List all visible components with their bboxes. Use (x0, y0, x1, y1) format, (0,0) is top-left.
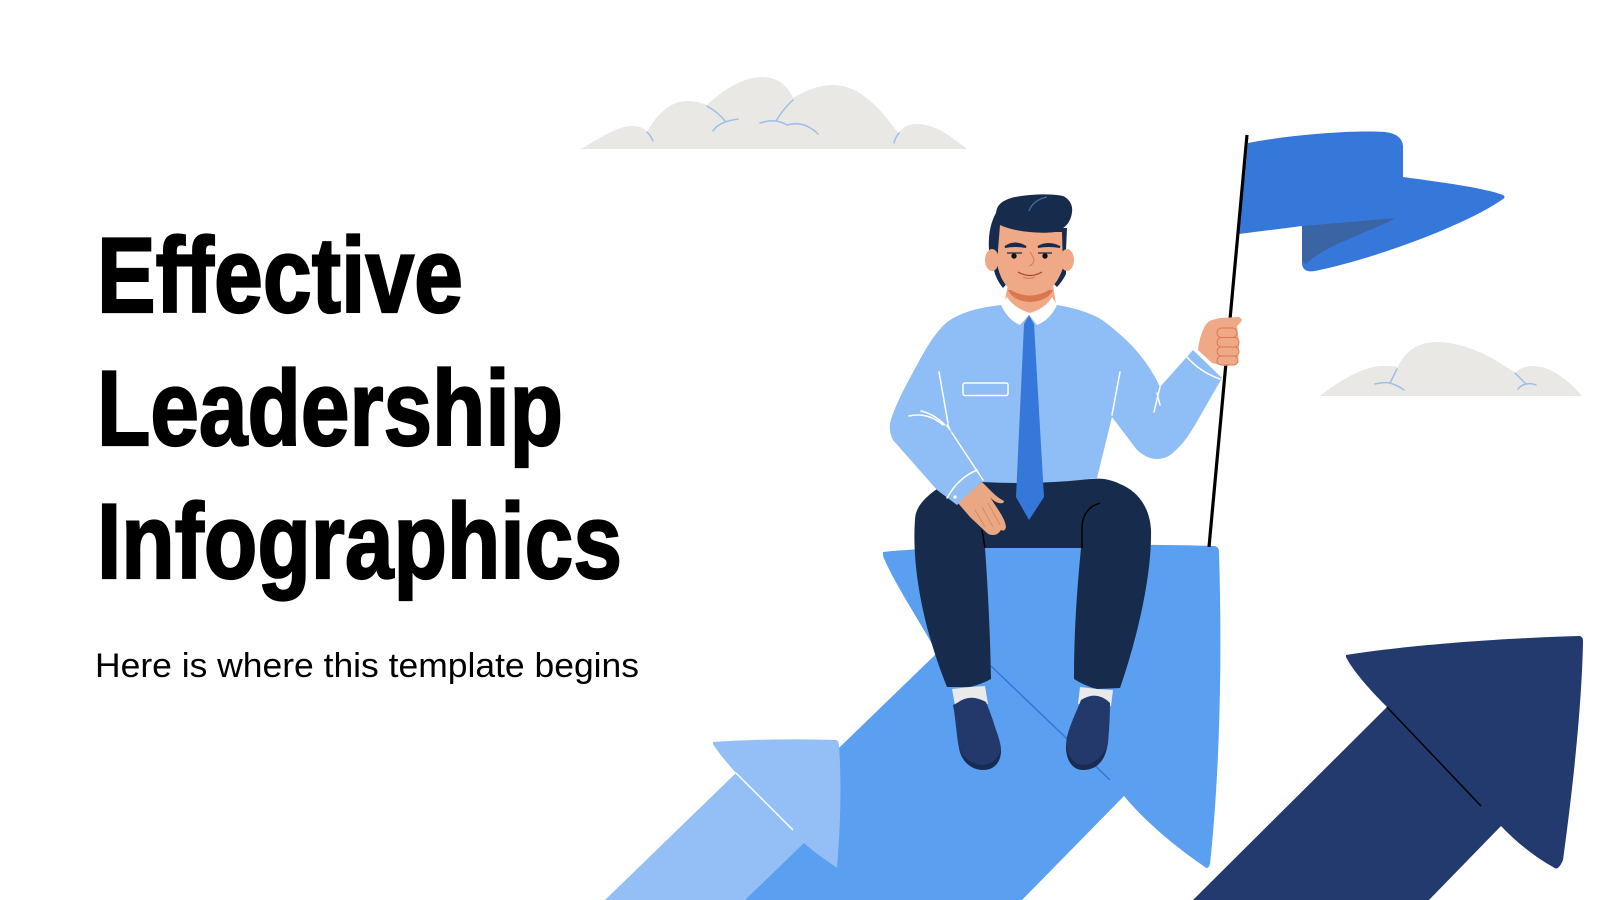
cloud: right (1320, 342, 1582, 396)
back hair (989, 204, 1067, 288)
tie (1016, 315, 1044, 520)
hand holding pole (1198, 317, 1242, 366)
title: Infographics (97, 481, 622, 601)
hand on knee (958, 482, 1006, 535)
flag front (1239, 132, 1403, 234)
ears (985, 249, 999, 271)
face (998, 225, 1063, 296)
shirt details: elbow fold and buttons (946, 370, 1220, 499)
title: Leadership (97, 348, 563, 468)
title: Effective (97, 215, 463, 335)
arrow: light blue (605, 739, 840, 900)
arrow: middle blue (682, 545, 1220, 900)
title (97, 215, 622, 601)
hair (996, 194, 1072, 233)
collar (1001, 297, 1057, 325)
trousers (914, 479, 1151, 689)
flag (1239, 132, 1504, 271)
flag fold shadow (1302, 218, 1396, 264)
subtitle: Here is where this template begins (95, 647, 639, 685)
facial features (1005, 244, 1060, 278)
left sock and shoe (952, 686, 1001, 770)
flag pole (1209, 135, 1247, 547)
shirt (890, 305, 1222, 505)
flag tail (1302, 177, 1504, 271)
shirt details (909, 357, 1220, 498)
neck (1004, 285, 1056, 318)
arrow: dark navy (1193, 636, 1583, 900)
person (890, 194, 1242, 770)
right sock and shoe (1066, 687, 1113, 770)
cloud: top centre (581, 77, 967, 149)
